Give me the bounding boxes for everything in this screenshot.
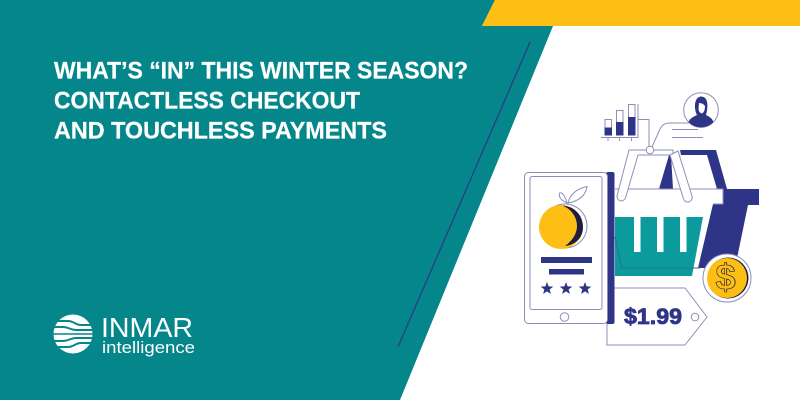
yellow top band — [482, 0, 800, 26]
price tag — [607, 288, 707, 345]
icon: person avatar — [684, 93, 718, 127]
icon: dollar coin — [703, 254, 751, 302]
title: AND TOUCHLESS PAYMENTS — [54, 118, 387, 144]
handle joint and connectors — [638, 120, 703, 154]
title: WHAT’S “IN” THIS WINTER SEASON? — [54, 58, 468, 84]
tablet — [524, 172, 614, 324]
diagonal accent line — [398, 42, 530, 347]
panel: teal background — [0, 0, 553, 400]
icon: dollar coin: $ — [716, 256, 736, 298]
wordmark: INMAR — [101, 312, 193, 343]
price: $1.99 — [624, 304, 682, 329]
product lines — [541, 257, 592, 263]
title — [54, 58, 468, 144]
bar chart — [601, 104, 638, 141]
icon: dollar coin: $ — [715, 256, 736, 298]
rating stars — [541, 282, 591, 294]
basket handle front — [617, 150, 692, 202]
illustration: shopping — [524, 93, 759, 345]
basket back wall — [698, 189, 759, 268]
basket teal fill — [615, 217, 703, 276]
basket slots — [634, 213, 686, 252]
logo: Inmar Intelligence — [53, 312, 195, 357]
title: CONTACTLESS CHECKOUT — [54, 88, 360, 114]
icon: striped globe — [53, 314, 94, 354]
basket back handle — [659, 150, 727, 189]
tagline: intelligence — [102, 338, 195, 357]
basket outline — [615, 189, 723, 268]
icon: orange fruit — [539, 186, 587, 249]
